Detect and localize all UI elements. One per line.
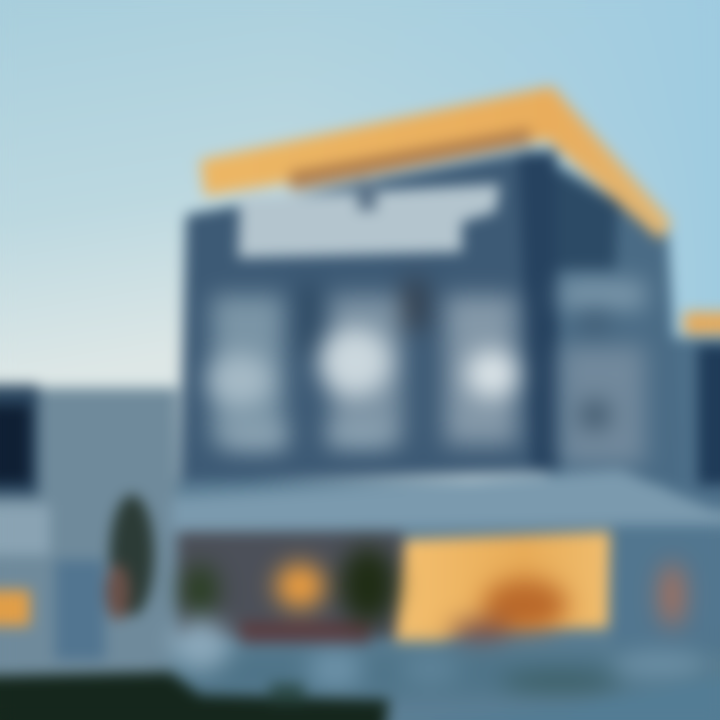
upper side shade — [556, 170, 618, 270]
glowing shop window — [395, 532, 610, 642]
dark green hedge — [0, 672, 390, 720]
tower windows — [212, 280, 645, 465]
corner pillar — [518, 150, 560, 470]
left background building — [0, 385, 178, 720]
shrub row — [170, 619, 720, 698]
window highlights — [208, 312, 608, 449]
rooftop sign — [238, 180, 500, 258]
ground floor interior — [178, 525, 720, 655]
canopy — [172, 470, 720, 552]
tower front face — [180, 150, 548, 482]
base tone under lower building — [0, 480, 720, 720]
main building tower — [180, 150, 682, 485]
road at lower right — [395, 678, 720, 720]
orange roof slab — [200, 86, 672, 240]
tower side face — [535, 150, 682, 485]
right background building — [665, 312, 720, 508]
interior details — [182, 547, 684, 644]
